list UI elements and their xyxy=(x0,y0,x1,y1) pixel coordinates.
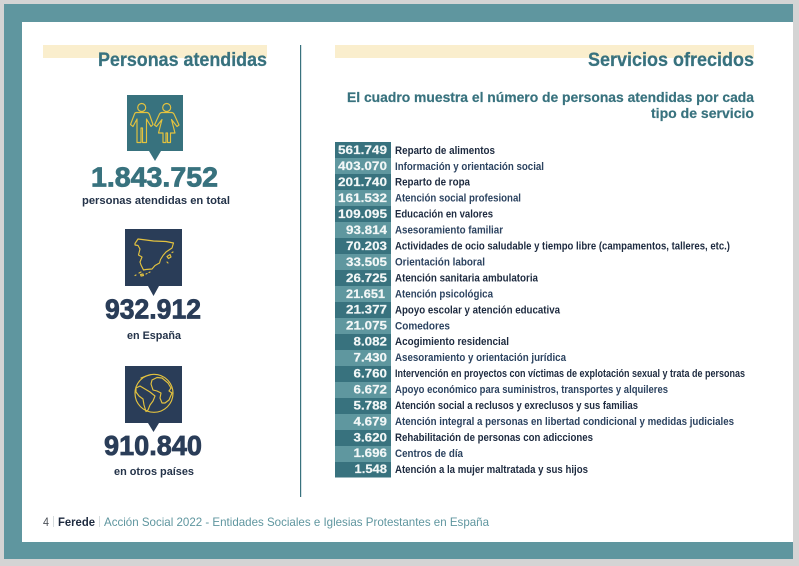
row 6: Asesoramiento familiar xyxy=(395,225,504,237)
row 1: Reparto de alimentos xyxy=(395,145,495,157)
row 9 xyxy=(335,270,539,286)
row 7 xyxy=(335,238,730,254)
row 5: 109.095 xyxy=(338,207,387,221)
row 14: 7.430 xyxy=(354,351,387,365)
stat: otros países xyxy=(104,430,202,478)
row 3: Reparto de ropa xyxy=(395,177,471,189)
row 21: 1.548 xyxy=(354,462,387,476)
row 19 xyxy=(335,430,593,446)
stat: España xyxy=(105,294,201,342)
panel: personas atendidas xyxy=(43,45,267,478)
row 7: 70.203 xyxy=(346,239,387,253)
stat: otros países: 910.840 xyxy=(104,430,202,461)
row 16: Apoyo económico para suministros, transportes y alquileres xyxy=(395,384,668,396)
stat: España: en España xyxy=(127,330,182,342)
row 5: Educación en valores xyxy=(395,209,493,221)
row 10: Atención psicológica xyxy=(395,288,494,300)
row 19: 3.620 xyxy=(354,430,387,444)
row 9: Atención sanitaria ambulatoria xyxy=(395,272,539,284)
row 10 xyxy=(335,286,494,302)
row 2 xyxy=(335,158,544,174)
subheading: El cuadro muestra el número de personas atendidas por cada xyxy=(347,89,754,105)
row 13: 8.082 xyxy=(354,335,387,349)
icon: people xyxy=(127,95,183,161)
row 1: 561.749 xyxy=(338,143,387,157)
row 4: Atención social profesional xyxy=(395,193,521,205)
row 6 xyxy=(335,222,504,238)
row 3 xyxy=(335,174,471,190)
row 15: 6.760 xyxy=(354,366,387,380)
footer: 4 xyxy=(43,515,49,529)
row 16: 6.672 xyxy=(354,382,387,396)
row 17: Atención social a reclusos y exreclusos y sus familias xyxy=(395,400,638,412)
row 11: Apoyo escolar y atención educativa xyxy=(395,304,561,316)
row 5 xyxy=(335,206,493,222)
footer: Ferede xyxy=(58,515,95,529)
row 20: 1.696 xyxy=(354,446,387,460)
heading: servicios ofrecidos xyxy=(335,45,754,71)
row 13 xyxy=(335,334,509,350)
stat: total: 1.843.752 xyxy=(91,162,218,192)
stat: otros países: en otros países xyxy=(114,466,194,478)
row 17: 5.788 xyxy=(354,398,387,412)
row 8: Orientación laboral xyxy=(395,256,485,268)
footer: Acción Social 2022 - Entidades Sociales e Iglesias Protestantes en España xyxy=(104,515,489,529)
row 18: 4.679 xyxy=(354,414,387,428)
row 20 xyxy=(335,446,464,462)
table: services by persons attended xyxy=(335,142,745,478)
row 4: 161.532 xyxy=(338,191,387,205)
row 8 xyxy=(335,254,485,270)
row 18: Atención integral a personas en libertad condicional y medidas judiciales xyxy=(395,416,734,428)
row 12: Comedores xyxy=(395,320,450,332)
row 7: Actividades de ocio saludable y tiempo libre (campamentos, talleres, etc.) xyxy=(395,240,730,252)
row 11: 21.377 xyxy=(346,303,387,317)
row 14: Asesoramiento y orientación jurídica xyxy=(395,352,567,364)
row 4 xyxy=(335,190,521,206)
row 1 xyxy=(335,142,495,158)
row 14 xyxy=(335,350,567,366)
row 13: Acogimiento residencial xyxy=(395,336,509,348)
row 3: 201.740 xyxy=(338,175,387,189)
row 8: 33.505 xyxy=(346,255,387,269)
row 2: 403.070 xyxy=(338,159,387,173)
row 12: 21.075 xyxy=(346,319,387,333)
row 12 xyxy=(335,318,450,334)
row 19: Rehabilitación de personas con adicciones xyxy=(395,432,593,444)
stat: España: 932.912 xyxy=(105,294,201,324)
row 6: 93.814 xyxy=(346,223,387,237)
stat: total: personas atendidas en total xyxy=(82,195,230,207)
row 2: Información y orientación social xyxy=(395,161,544,173)
panel: servicios ofrecidos xyxy=(335,45,754,478)
row 21: Atención a la mujer maltratada y sus hijos xyxy=(395,464,588,476)
row 15 xyxy=(335,366,745,382)
row 18 xyxy=(335,414,734,430)
heading: personas atendidas xyxy=(43,45,267,71)
row 11 xyxy=(335,302,561,318)
subheading xyxy=(347,89,754,121)
icon: map of Spain xyxy=(125,229,182,296)
heading: personas atendidas: Personas atendidas xyxy=(98,49,267,71)
row 21 xyxy=(335,462,588,478)
row 9: 26.725 xyxy=(346,271,387,285)
stat: total xyxy=(82,162,230,207)
row 16 xyxy=(335,382,668,398)
row 17 xyxy=(335,398,638,414)
row 20: Centros de día xyxy=(395,448,464,460)
subheading: tipo de servicio xyxy=(651,105,754,121)
row 10: 21.651 xyxy=(346,287,385,301)
heading: servicios ofrecidos: Servicios ofrecidos xyxy=(588,49,754,71)
icon: globe xyxy=(125,366,182,432)
column divider xyxy=(300,45,301,497)
